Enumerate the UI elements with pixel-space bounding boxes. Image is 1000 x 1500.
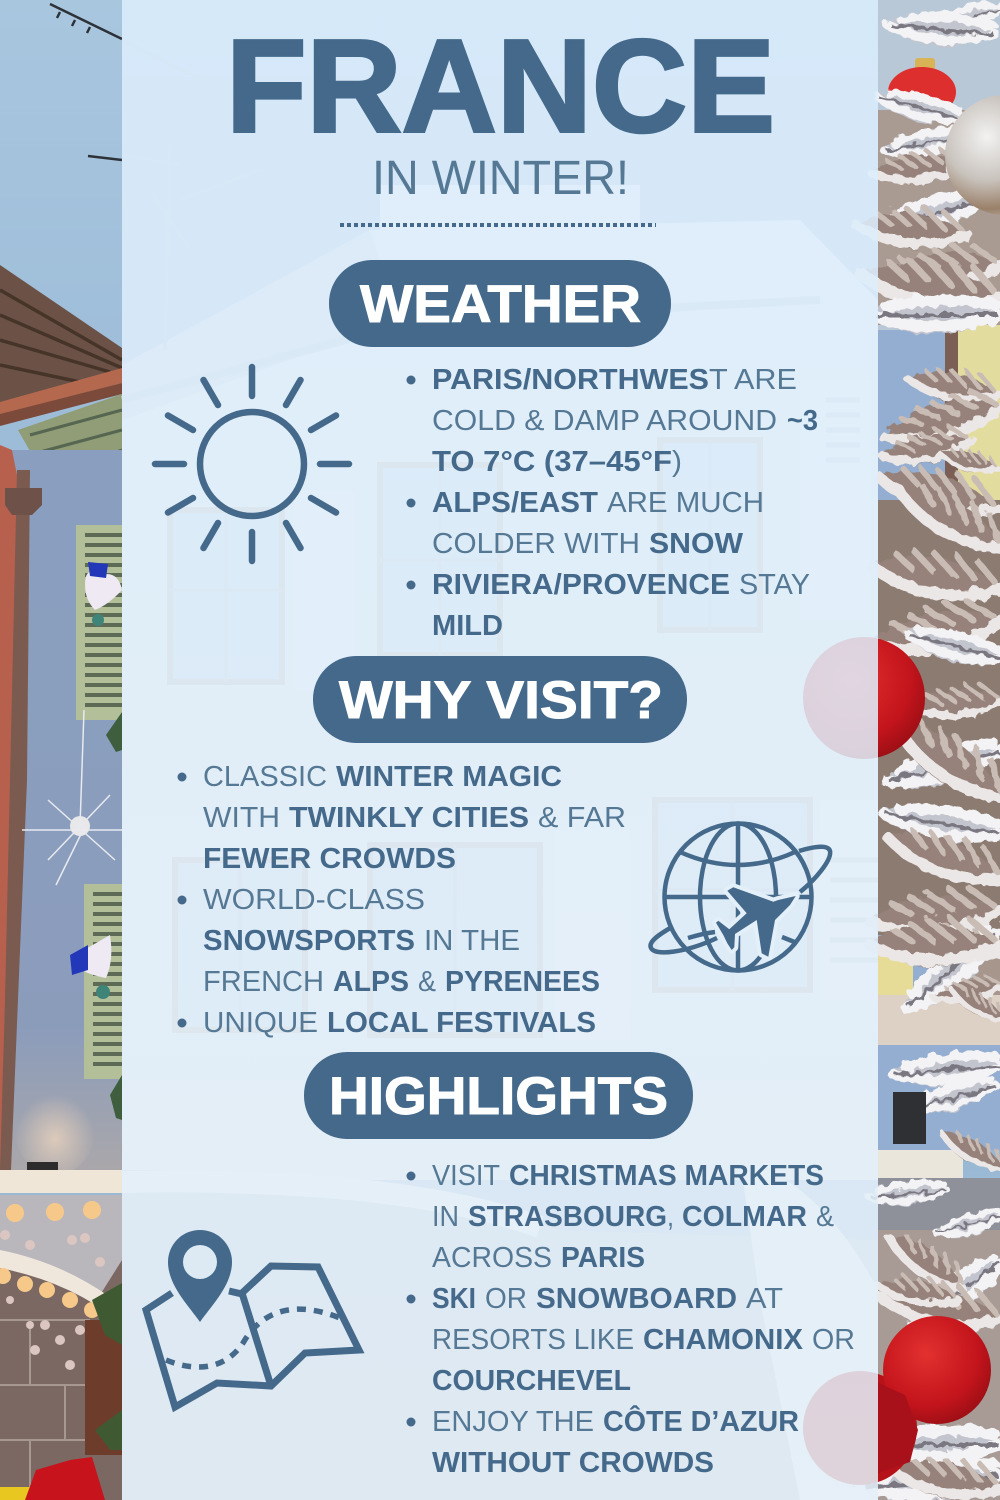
weather bullet list: COLD & DAMP AROUND xyxy=(432,405,777,437)
house wall xyxy=(0,450,122,1172)
icon: map with pin xyxy=(146,1230,359,1407)
why visit bullet list: WINTER MAGIC xyxy=(336,761,562,793)
highlights bullet list: PARIS xyxy=(561,1242,645,1274)
why visit bullet list: PYRENEES xyxy=(445,966,600,998)
icon: sun xyxy=(155,367,349,561)
highlights bullet list: CHRISTMAS MARKETS xyxy=(509,1160,824,1192)
plants xyxy=(106,712,122,1120)
heading: weather: WEATHER xyxy=(360,275,641,334)
highlights bullet list: CHAMONIX xyxy=(643,1324,804,1356)
wall behind tree xyxy=(878,0,1000,1500)
wall glow xyxy=(15,1085,95,1175)
why visit bullet list: UNIQUE xyxy=(203,1007,318,1039)
highlights bullet list: WITHOUT CROWDS xyxy=(432,1447,714,1479)
weather bullet list: TO 7°C (37–45°F xyxy=(432,446,672,478)
why visit bullet list: FRENCH xyxy=(203,966,324,998)
weather bullet list: ~3 xyxy=(787,405,818,437)
heading: highlights: HIGHLIGHTS xyxy=(329,1067,668,1126)
antennas left of panel xyxy=(50,4,122,160)
salmon neighbouring wall and drainpipe xyxy=(0,445,42,1170)
pot on ledge xyxy=(893,1092,926,1144)
why visit bullet list: WORLD-CLASS xyxy=(203,884,425,916)
market arch xyxy=(0,1170,122,1500)
weather bullet list: ARE MUCH xyxy=(607,487,764,519)
house gutter and eave xyxy=(0,368,122,478)
highlights bullet list xyxy=(406,1160,855,1479)
why visit bullet list: IN THE xyxy=(424,925,520,957)
weather bullet list: COLDER WITH xyxy=(432,528,640,560)
why visit bullet list: SNOWSPORTS xyxy=(203,925,415,957)
Christmas tree branches xyxy=(850,0,1000,1500)
why visit bullet list: LOCAL FESTIVALS xyxy=(327,1007,596,1039)
heading: why visit xyxy=(313,656,687,743)
highlights bullet list: IN xyxy=(432,1201,459,1233)
why visit bullet list: FEWER CROWDS xyxy=(203,843,456,875)
heading: why visit: WHY VISIT? xyxy=(339,671,663,730)
shutters xyxy=(76,525,136,720)
why visit bullet list xyxy=(178,761,626,1039)
heading: highlights xyxy=(304,1052,693,1139)
why visit bullet list: CLASSIC xyxy=(203,761,327,793)
highlights bullet list: COLMAR xyxy=(682,1201,807,1233)
weather bullet list: ) xyxy=(672,446,682,478)
highlights bullet list: CÔTE D’AZUR xyxy=(603,1404,799,1438)
weather bullet list: STAY xyxy=(739,569,810,601)
weather bullet list: PARIS/NORTHWES xyxy=(432,364,709,396)
highlights bullet list: RESORTS LIKE xyxy=(432,1324,634,1356)
highlights bullet list: ENJOY THE xyxy=(432,1406,594,1438)
highlights bullet list: STRASBOURG xyxy=(468,1201,667,1233)
highlights bullet list: , xyxy=(667,1201,674,1233)
title: FRANCE xyxy=(226,12,775,160)
highlights bullet list: AT xyxy=(746,1283,783,1315)
ghost building under panel xyxy=(122,40,878,1500)
weather bullet list: ALPS/EAST xyxy=(432,487,598,519)
house roof xyxy=(0,265,122,405)
icon: globe with airplane xyxy=(650,824,830,970)
decorations on wall xyxy=(22,562,122,999)
weather bullet list: SNOW xyxy=(649,528,744,560)
why visit bullet list: ALPS xyxy=(333,966,409,998)
ornaments xyxy=(803,95,1000,1485)
weather bullet list xyxy=(406,364,818,642)
why visit bullet list: & FAR xyxy=(538,802,626,834)
icon: airplane xyxy=(716,887,796,957)
Christmas tree foliage masses xyxy=(878,110,1000,1500)
subtitle: IN WINTER! xyxy=(372,152,629,205)
why visit bullet list: WITH xyxy=(203,802,280,834)
highlights bullet list: SKI xyxy=(432,1283,476,1315)
weather bullet list: T ARE xyxy=(709,364,797,396)
highlights bullet list: OR xyxy=(485,1283,527,1315)
highlights bullet list: COURCHEVEL xyxy=(432,1365,631,1397)
highlights bullet list: SNOWBOARD xyxy=(536,1283,737,1315)
highlights bullet list: OR xyxy=(812,1324,855,1356)
translucent centre panel xyxy=(122,0,878,1500)
why visit bullet list: TWINKLY CITIES xyxy=(289,802,529,834)
weather bullet list: MILD xyxy=(432,610,503,642)
highlights bullet list: ACROSS xyxy=(432,1242,552,1274)
highlights bullet list: VISIT xyxy=(432,1160,500,1192)
highlights bullet list: & xyxy=(816,1201,834,1233)
why visit bullet list: & xyxy=(418,966,436,998)
weather bullet list: RIVIERA/PROVENCE xyxy=(432,569,730,601)
heading: weather xyxy=(329,260,671,347)
ornament: top red bauble xyxy=(888,58,956,117)
